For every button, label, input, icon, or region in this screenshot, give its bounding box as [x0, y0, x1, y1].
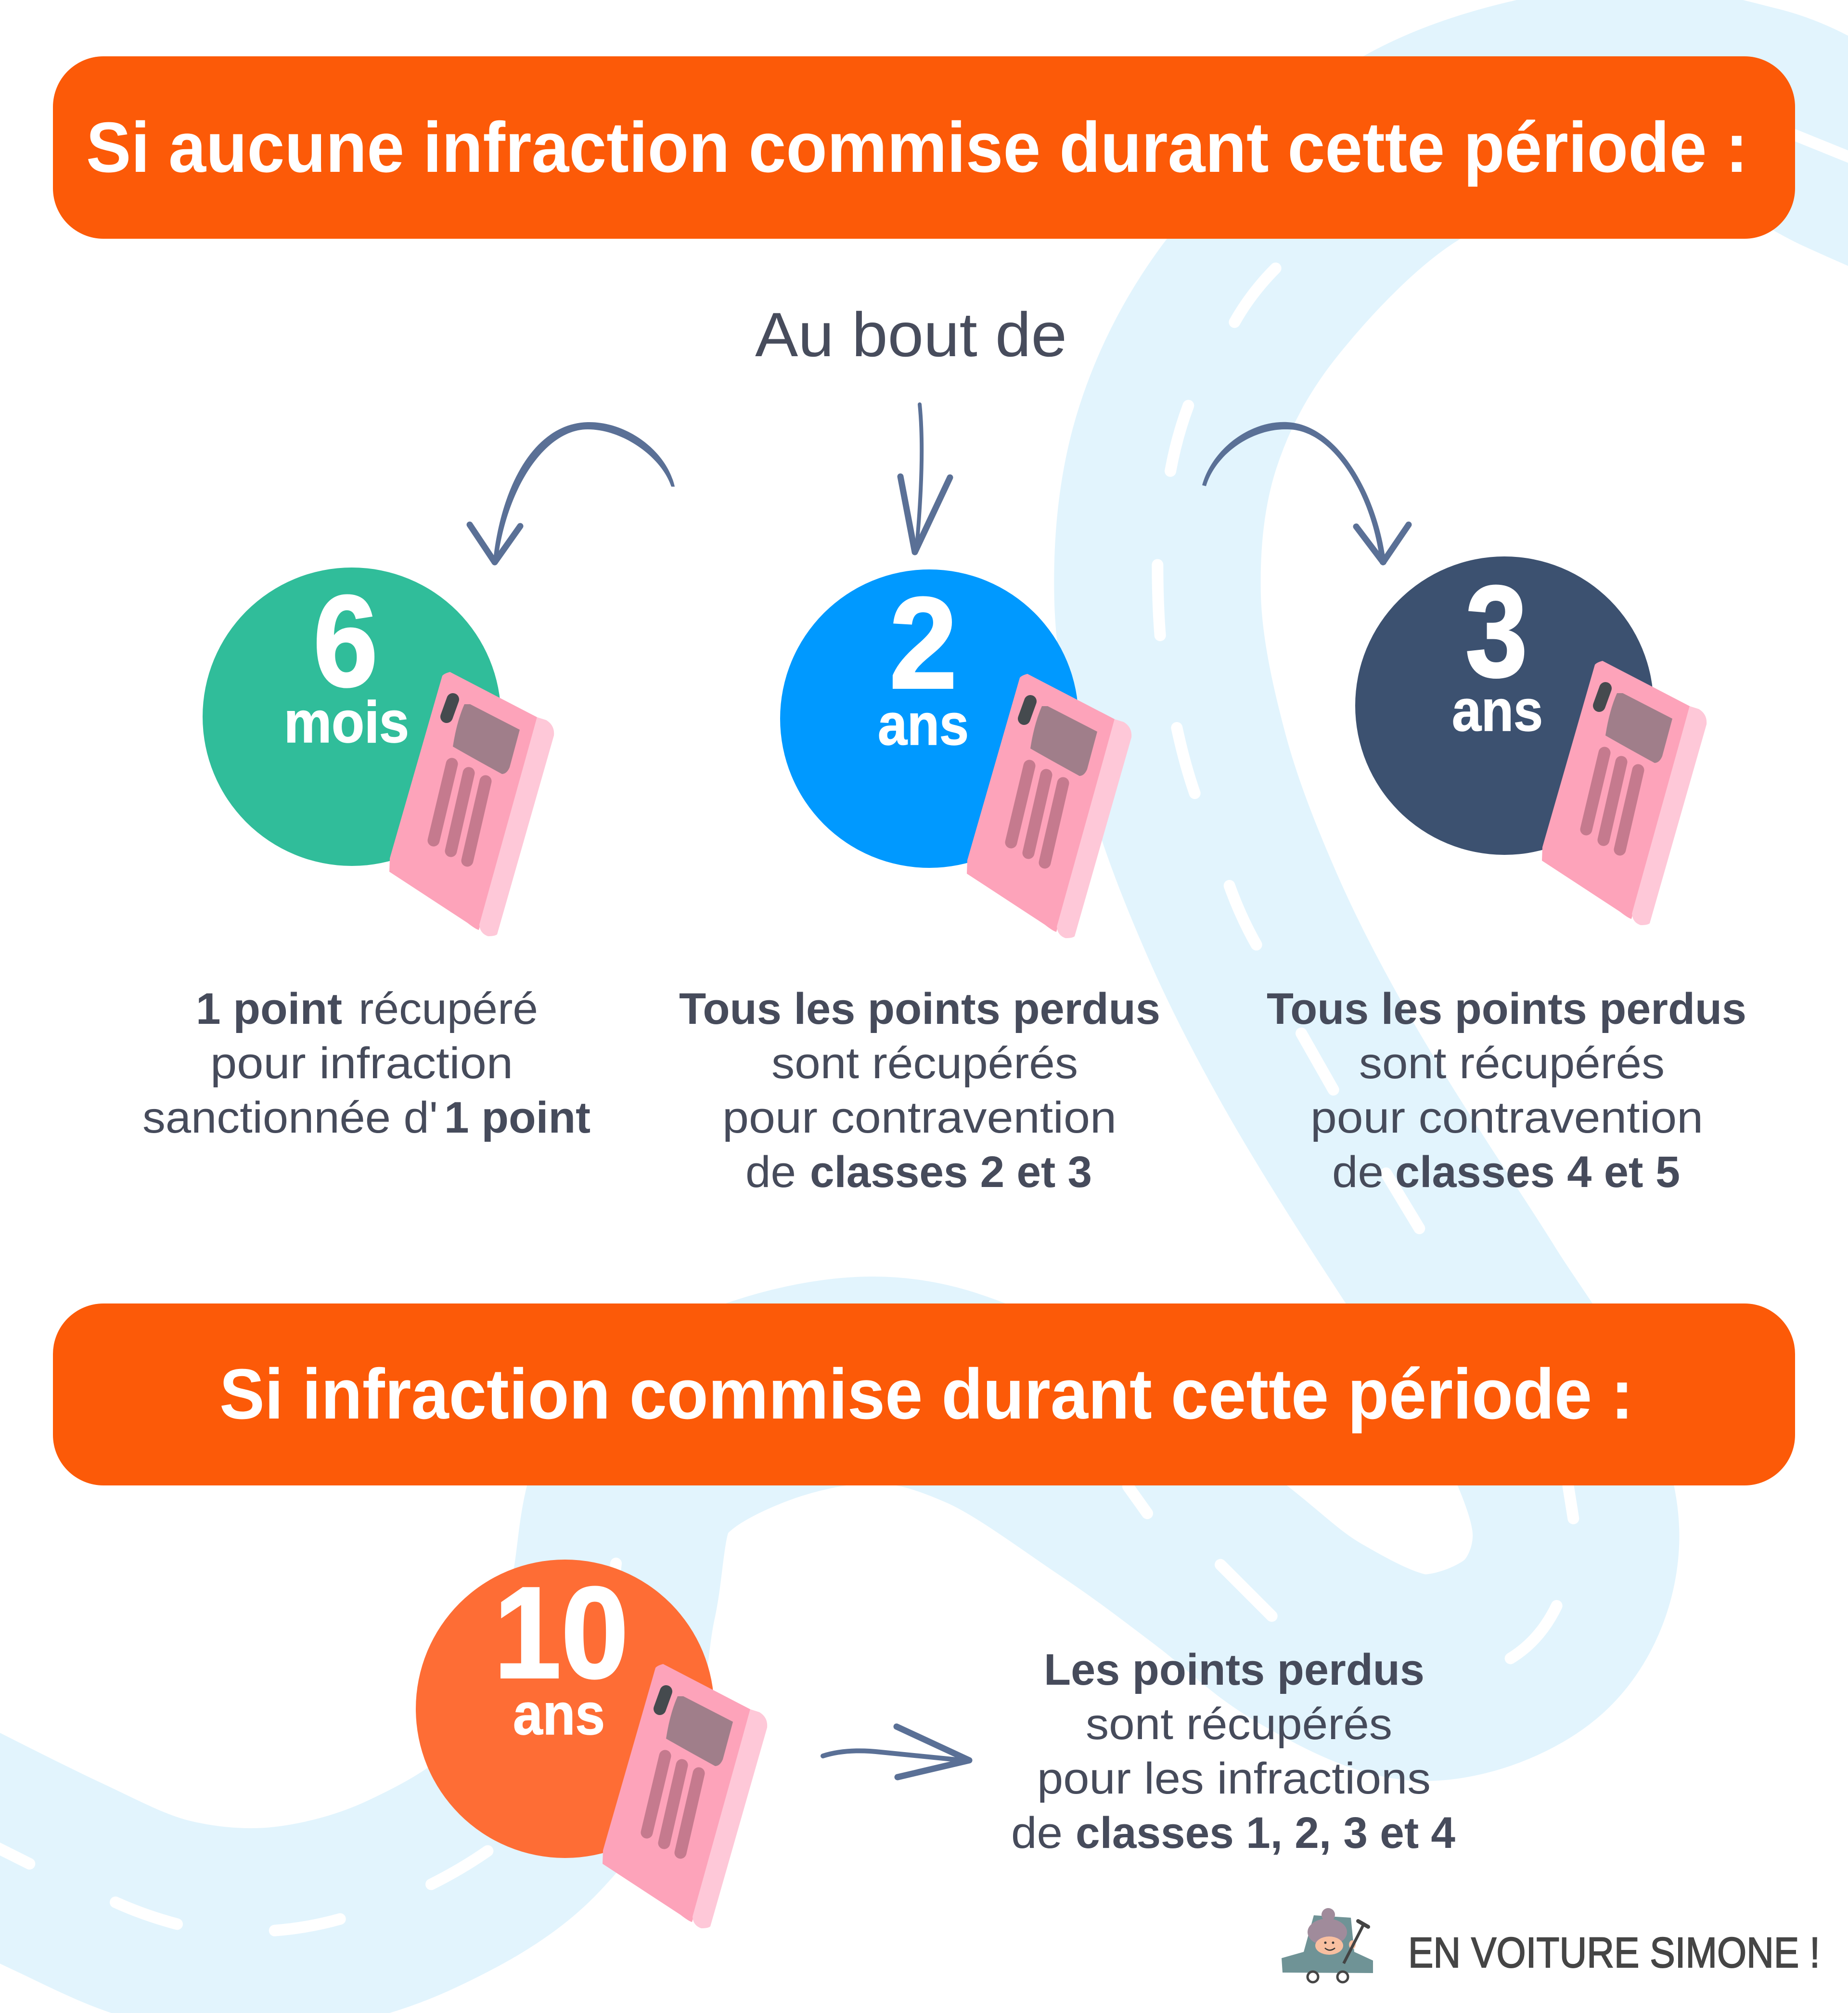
text: 2 ans rule: Tous les points perdus [679, 984, 1160, 1033]
text: 2 ans rule: pour contravention [722, 1093, 1116, 1142]
circle: 10 ans: 10 [494, 1561, 629, 1705]
arrow: to 6 mois [470, 422, 675, 564]
text: 10 ans rule: sont récupérés [1086, 1700, 1392, 1749]
text: 6 mois rule: sanctionnée d' [142, 1093, 438, 1142]
circle: 6 mois: mois [284, 689, 409, 755]
text: 2 ans rule [679, 984, 1160, 1197]
text: 10 ans rule [1011, 1645, 1455, 1858]
icon: license card 2 [967, 674, 1131, 938]
logo: car with Simone [1282, 1908, 1373, 1982]
text: 6 mois rule: 1 point [444, 1093, 590, 1142]
text: 2 ans rule: classes 2 et 3 [810, 1148, 1092, 1197]
circle: 3 ans: ans [1452, 678, 1543, 743]
text: 2 ans rule: de [745, 1148, 796, 1197]
icon: license card 3 [1542, 661, 1707, 925]
text: 10 ans rule: classes 1, 2, 3 et 4 [1076, 1808, 1455, 1858]
circle: 2 ans: ans [878, 692, 969, 757]
text: 6 mois rule [142, 984, 590, 1142]
circle: 6 mois: 6 [313, 569, 378, 714]
text: 3 ans rule [1267, 984, 1746, 1197]
text: 10 ans rule: Les points perdus [1044, 1645, 1424, 1694]
banner: no infraction: Si aucune infraction commise durant cette période : [86, 108, 1748, 187]
circle: 2 ans [780, 569, 1078, 868]
text: 3 ans rule: sont récupérés [1359, 1039, 1665, 1088]
circle: 3 ans [1355, 556, 1654, 855]
circle: 6 mois [203, 568, 501, 866]
text: 3 ans rule: pour contravention [1310, 1093, 1703, 1142]
icon: license card 4 [603, 1664, 767, 1928]
circle: 10 ans [416, 1560, 714, 1858]
arrow: to 3 ans [1202, 422, 1409, 564]
text: 3 ans rule: classes 4 et 5 [1395, 1148, 1680, 1197]
circle: 3 ans: 3 [1465, 559, 1527, 704]
text: 10 ans rule: de [1011, 1808, 1063, 1858]
banner: with infraction: Si infraction commise durant cette période : [219, 1355, 1633, 1434]
arrow: to 2 ans [900, 404, 950, 552]
banner: with infraction [53, 1303, 1795, 1485]
text: 6 mois rule: pour infraction [210, 1039, 513, 1088]
text: 3 ans rule: Tous les points perdus [1267, 984, 1746, 1033]
arrow: to 10 ans text [823, 1727, 969, 1777]
text: 6 mois rule: 1 point [196, 984, 342, 1033]
heading: Au bout de: Au bout de [755, 299, 1067, 370]
icon: license card 1 [389, 672, 554, 936]
circle: 2 ans: 2 [889, 571, 957, 716]
text: 3 ans rule: de [1332, 1148, 1384, 1197]
text: 2 ans rule: sont récupérés [771, 1039, 1078, 1088]
text: 10 ans rule: pour les infractions [1037, 1754, 1431, 1803]
text: 6 mois rule: récupéré [359, 984, 538, 1033]
circle: 10 ans: ans [513, 1681, 605, 1747]
banner: no infraction [53, 56, 1795, 239]
